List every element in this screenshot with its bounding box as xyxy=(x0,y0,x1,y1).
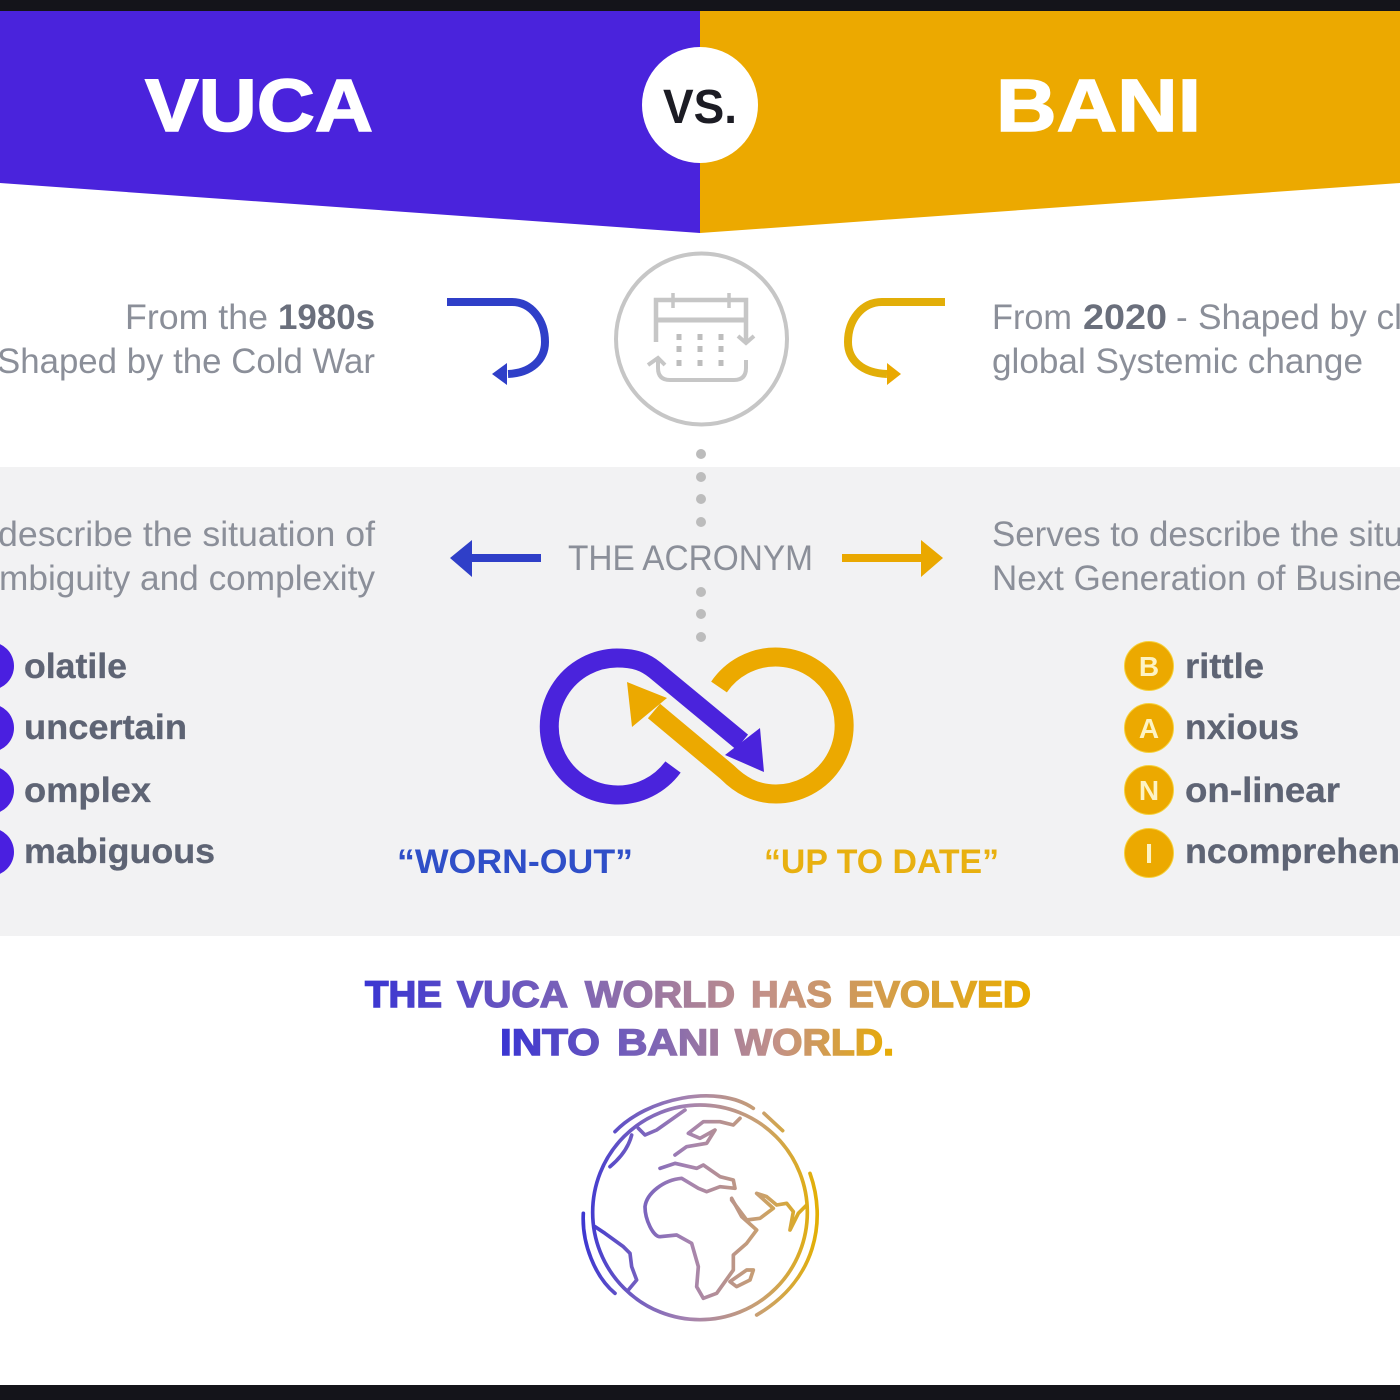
header: VUCA xyxy=(0,11,700,233)
text: BANI origin xyxy=(992,298,1400,381)
list: BANI: ncomprehen xyxy=(1185,832,1400,871)
text: VUCA description xyxy=(0,515,376,598)
list: BANI: N xyxy=(1139,775,1159,806)
text: BANI description xyxy=(992,515,1400,598)
text: VUCA origin xyxy=(0,298,375,381)
text: BANI origin: From xyxy=(992,298,1072,337)
vs badge xyxy=(642,47,758,163)
heading: VUCA: VUCA xyxy=(145,64,373,147)
list: BANI xyxy=(1124,642,1400,878)
closing statement: BANI xyxy=(617,1022,720,1063)
closing statement: HAS xyxy=(751,974,832,1015)
arrow: amber curved xyxy=(848,302,945,385)
list: VUCA: uncertain xyxy=(24,708,187,747)
closing statement: INTO xyxy=(500,1022,600,1063)
text: VUCA description: mbiguity and complexity xyxy=(0,559,376,598)
closing statement: WORLD xyxy=(585,974,735,1015)
icon: globe xyxy=(583,1096,817,1320)
closing statement: EVOLVED xyxy=(848,974,1031,1015)
header: BANI xyxy=(700,11,1400,233)
list: BANI: rittle xyxy=(1185,647,1264,686)
list: BANI: B xyxy=(1139,651,1159,682)
heading: BANI: BANI xyxy=(996,64,1201,147)
closing statement xyxy=(365,974,1031,1063)
dotted connector xyxy=(696,449,706,642)
list: VUCA: omplex xyxy=(24,771,152,810)
list: VUCA: mabiguous xyxy=(24,832,215,871)
label: worn-out: “WORN-OUT” xyxy=(397,843,633,881)
list: VUCA: olatile xyxy=(24,647,127,686)
list: BANI: nxious xyxy=(1185,708,1299,747)
arrow: blue curved xyxy=(447,302,545,385)
text: VUCA origin: From the xyxy=(125,298,268,337)
text: BANI origin: Shaped by cl xyxy=(1198,298,1400,337)
top black bar xyxy=(0,0,1400,11)
bottom black bar xyxy=(0,1385,1400,1400)
list: BANI: I xyxy=(1145,838,1153,869)
text: VUCA origin: Shaped by the Cold War xyxy=(0,342,375,381)
arrow: amber right xyxy=(842,540,943,577)
text: BANI origin: global Systemic change xyxy=(992,342,1363,381)
text: VUCA origin: 1980s xyxy=(278,298,375,337)
label: the acronym: THE ACRONYM xyxy=(568,539,813,578)
text: BANI origin: 2020 xyxy=(1083,298,1167,337)
arrow: blue left xyxy=(450,540,541,577)
closing statement: WORLD. xyxy=(735,1022,894,1063)
vs badge: VS. xyxy=(663,81,737,134)
text: VUCA description: describe the situation of xyxy=(0,515,375,554)
closing statement: THE xyxy=(365,974,442,1015)
text: BANI description: Serves to describe the situ xyxy=(992,515,1400,554)
icon: infinity arrows xyxy=(549,657,844,795)
list: BANI: A xyxy=(1139,713,1159,744)
panel: the acronym xyxy=(0,467,1400,936)
closing statement: VUCA xyxy=(457,974,568,1015)
label: up to date: “UP TO DATE” xyxy=(764,843,999,881)
text: BANI origin: - xyxy=(1176,298,1188,337)
text: BANI description: Next Generation of Busine xyxy=(992,559,1400,598)
list: BANI: on-linear xyxy=(1185,771,1340,810)
icon: calendar cycle xyxy=(616,254,787,424)
list: VUCA xyxy=(0,642,215,876)
